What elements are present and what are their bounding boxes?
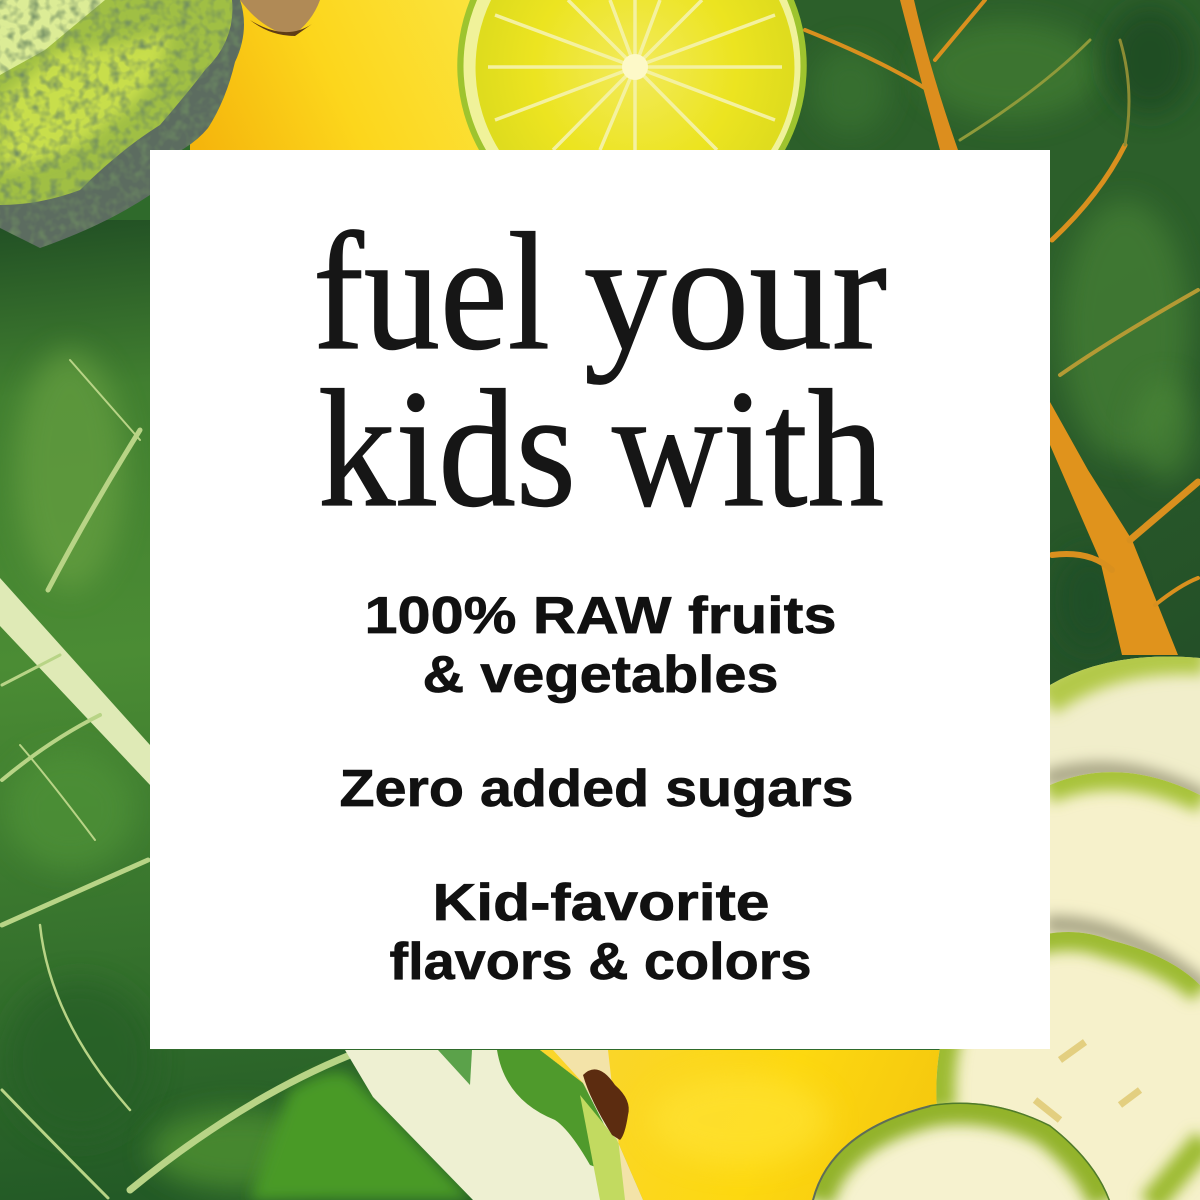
photo: broccoli — [0, 0, 250, 250]
slice 3 — [930, 920, 1200, 1200]
photo: zucchini slices — [812, 650, 1200, 1200]
text block: benefits: Zero added sugars — [340, 760, 854, 818]
photo: pineapple bottom — [540, 1050, 945, 1200]
photo: white chard rib bottom — [345, 1050, 643, 1200]
photo: lime slice — [457, 0, 807, 150]
slice 2 — [1050, 772, 1200, 985]
text block: benefits: & vegetables — [422, 646, 778, 704]
slice 4 — [812, 1095, 1112, 1200]
leaf rib — [0, 578, 150, 785]
heading: kids — [318, 356, 576, 542]
heading: with — [612, 356, 884, 542]
text block: benefits: Kid-favorite — [432, 874, 770, 932]
heading: fuel — [313, 199, 550, 385]
slice 1 — [1050, 656, 1200, 795]
orange ribs — [1050, 402, 1178, 655]
photo: pineapple top — [190, 0, 480, 150]
text block: benefits — [340, 587, 854, 991]
photo: green leaf left and bottom — [0, 220, 466, 1200]
text block: benefits: flavors & colors — [390, 933, 812, 991]
photo: chard leaf top right — [790, 0, 1200, 690]
white panel — [150, 150, 1050, 1049]
heading — [313, 199, 887, 542]
heading: your — [584, 199, 887, 385]
text block: benefits: 100% RAW fruits — [364, 587, 836, 645]
